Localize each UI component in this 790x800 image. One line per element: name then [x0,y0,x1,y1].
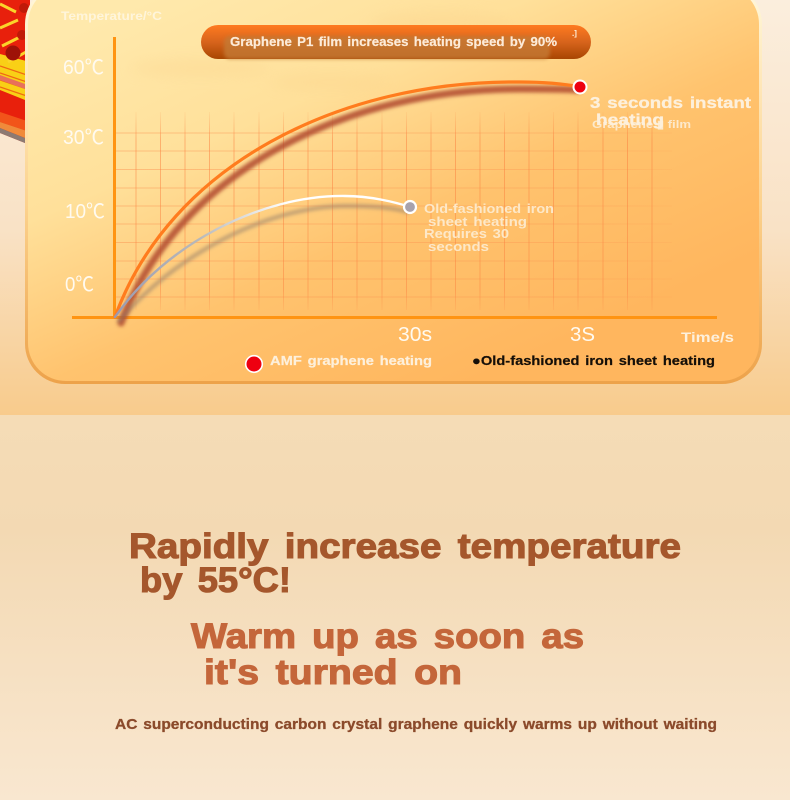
callout: graphene film: heating [596,112,664,129]
pill mark: .] [572,29,577,38]
pill soft highlight [224,36,550,59]
heading pill [201,25,591,59]
pill text: Graphene P1 film increases heating speed by 90% [230,35,557,49]
callout: graphene film: 3 seconds instant [590,95,752,112]
legend: graphene: AMF graphene heating [270,353,432,368]
curve line [115,196,410,317]
y tick labels: 60℃ [63,57,104,79]
callout: iron sheet: Requires 30 [424,226,509,241]
subheadline: it's turned on [204,653,462,692]
y tick labels: 0℃ [65,274,94,296]
product image corner [0,0,30,146]
background: lower section [0,415,790,800]
curve shadow [121,89,578,323]
legend: graphene [246,353,432,372]
marker: iron sheet end point [404,201,416,213]
chart grid [115,112,672,310]
y axis [113,37,116,318]
curve: old-fashioned heating [115,196,410,321]
callout: iron sheet: sheet heating [428,214,527,229]
callout: iron sheet: Old-fashioned iron [424,201,554,216]
pill body [201,25,591,59]
curve shadow [119,206,408,321]
curve: graphene heating [115,82,580,323]
panel: chart card [25,0,762,384]
y tick labels: 30℃ [63,127,104,149]
y axis title: Temperature/°C [61,9,162,23]
callout: iron sheet: seconds [428,239,489,254]
panel texture [130,12,510,89]
callout: iron sheet [424,201,554,254]
callout: graphene film [590,95,752,131]
curve line [115,82,580,317]
background: upper section [0,0,790,415]
headline [129,527,681,600]
subheadline: Warm up as soon as [191,617,584,656]
callout: graphene film: Graphene ▮ film [592,119,691,131]
description: AC superconducting carbon crystal graphene quickly warms up without waiting [115,716,717,733]
x axis [72,316,717,319]
x tick labels [398,324,595,346]
x axis title: Time/s [681,329,734,345]
x tick labels: 3S [570,324,595,346]
y tick labels: 10℃ [65,201,105,223]
headline: Rapidly increase temperature [129,527,681,566]
subheadline [191,617,584,692]
panel edge [25,0,762,384]
headline: by 55°C! [140,561,291,600]
panel body [28,0,759,381]
x tick labels: 30s [398,324,432,346]
marker: graphene end point [574,80,586,94]
legend: iron sheet: ●Old-fashioned iron sheet heating [472,353,715,368]
y tick labels [63,57,105,296]
